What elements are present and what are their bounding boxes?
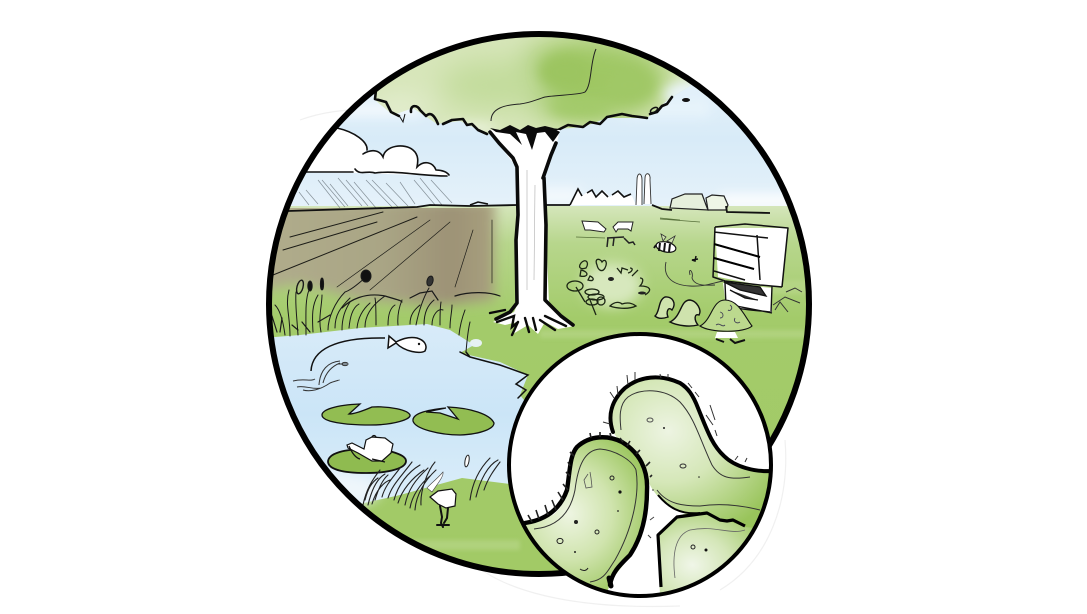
- sky: [290, 84, 787, 206]
- grass tufts: [773, 288, 802, 312]
- blob: third leaf: [660, 512, 753, 592]
- cows and fence: [576, 218, 700, 247]
- cloud: [306, 128, 450, 177]
- panel: magnified detail circle: [505, 334, 775, 600]
- large mushroom: [700, 300, 752, 343]
- standing frog: [427, 472, 456, 527]
- third leaf outline and marks: [658, 513, 745, 587]
- beehive: [713, 224, 788, 313]
- leaf hairs: [528, 432, 652, 522]
- rain hatching: [299, 178, 452, 208]
- magnifier ring: [509, 334, 771, 596]
- outer ring: [269, 34, 809, 574]
- foreground reeds: [363, 455, 500, 510]
- bee: [654, 234, 724, 286]
- tree trunk and roots: [488, 125, 575, 335]
- back reeds and cattails: [272, 270, 500, 352]
- blob: left leaf: [524, 432, 654, 590]
- clover patch: [567, 259, 650, 315]
- village and silos: [570, 174, 770, 213]
- canopy outline: [375, 90, 672, 134]
- fish with jump arc and splash: [293, 336, 426, 391]
- small mushrooms: [655, 297, 700, 326]
- tree canopy: [374, 37, 691, 136]
- leaf hairs: [603, 372, 747, 462]
- horizon: [288, 205, 570, 211]
- faint sketch lines around the magnifier: [300, 110, 786, 607]
- illustration: landscape in a circle with magnified detail: [266, 31, 812, 607]
- field furrows: [273, 212, 492, 290]
- frog on lily pad: [347, 436, 393, 462]
- field: [250, 200, 495, 306]
- panel: main landscape circle: [250, 30, 820, 581]
- blob: upper leaf: [603, 372, 775, 587]
- lily pads: [322, 404, 494, 473]
- pond: [262, 324, 540, 508]
- grass: [260, 206, 820, 581]
